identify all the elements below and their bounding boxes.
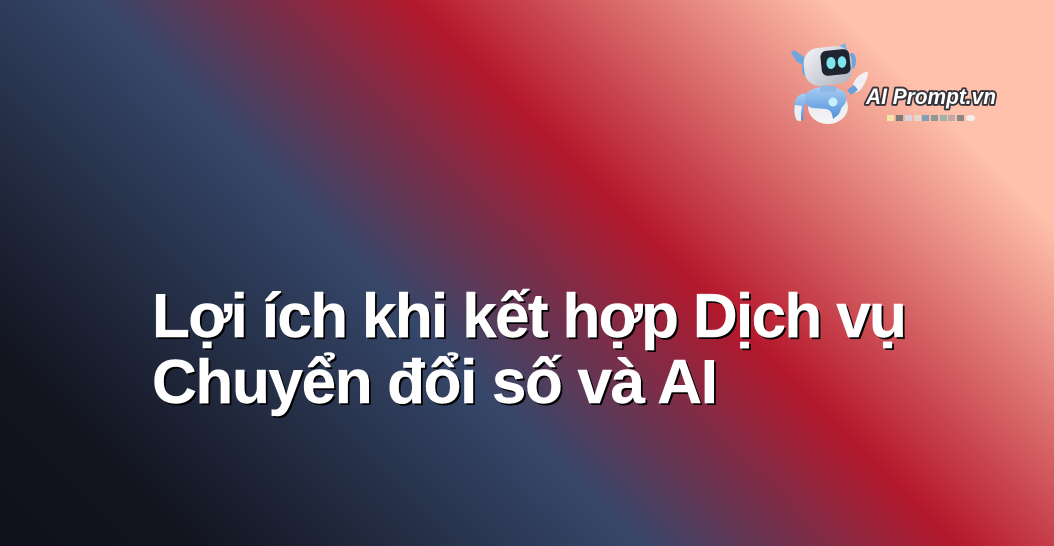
icon: robot	[791, 43, 868, 124]
title: Lợi ích khi kết hợp Dịch vụ	[152, 282, 905, 351]
title: Chuyển đổi số và AI	[152, 348, 717, 417]
logo: AI Prompt.vn robot mascot	[791, 43, 997, 124]
logo icon row	[887, 115, 975, 121]
title	[152, 282, 905, 418]
logo wordmark: AI Prompt.vn	[865, 84, 996, 109]
